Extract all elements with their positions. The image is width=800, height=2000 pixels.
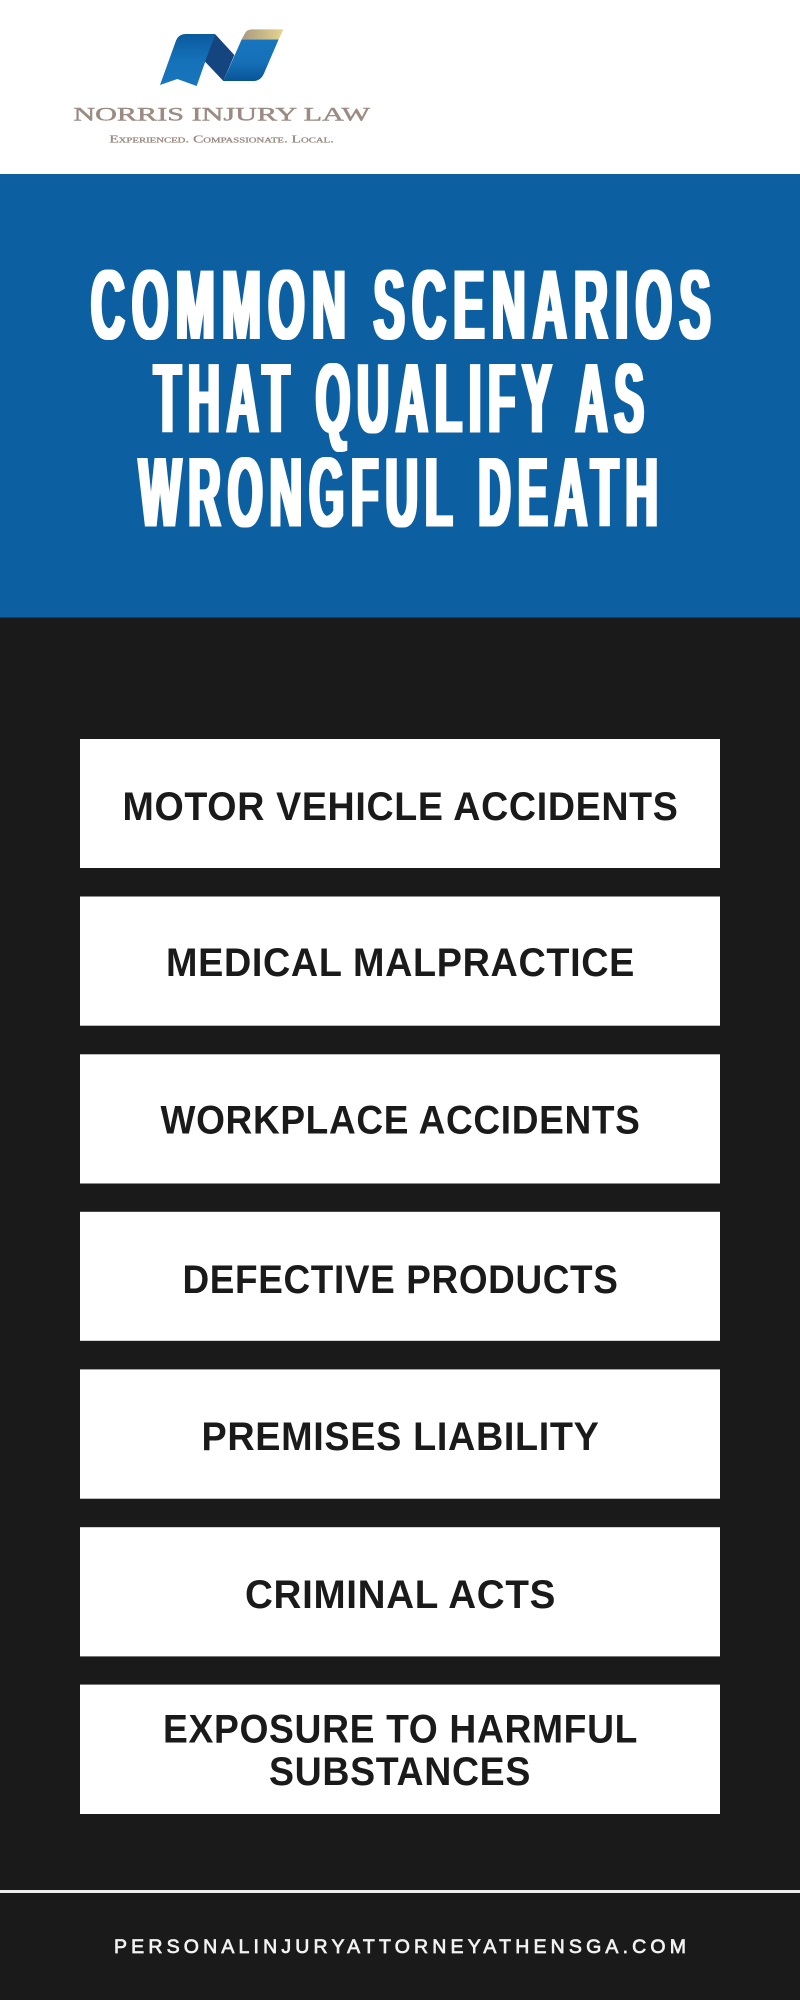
panel: scenario 1: MOTOR VEHICLE ACCIDENTS bbox=[122, 785, 678, 829]
footer url: PERSONALINJURYATTORNEYATHENSGA.COM bbox=[114, 1936, 686, 1958]
panel: scenario 6: CRIMINAL ACTS bbox=[245, 1573, 556, 1617]
panel: blue title band bbox=[0, 174, 800, 618]
panel: scenario 7 bbox=[80, 1685, 720, 1814]
panel: scenario 4 bbox=[80, 1212, 720, 1341]
icon: right ribbon bbox=[223, 39, 279, 81]
panel: scenario 4: DEFECTIVE PRODUCTS bbox=[182, 1258, 618, 1302]
panel: scenario 2: MEDICAL MALPRACTICE bbox=[166, 941, 635, 985]
title bbox=[91, 249, 718, 548]
logo name: NORRIS INJURY LAW bbox=[73, 104, 371, 125]
icon: left ribbon bbox=[160, 34, 215, 86]
panel: scenario 3: WORKPLACE ACCIDENTS bbox=[160, 1098, 640, 1142]
icon: dark fold bbox=[205, 34, 234, 81]
panel: scenario 2 bbox=[80, 896, 720, 1026]
panel: scenario 5 bbox=[80, 1369, 720, 1499]
panel: scenario 6 bbox=[80, 1527, 720, 1656]
panel: scenario 7: SUBSTANCES bbox=[269, 1750, 531, 1794]
panel: scenario 1 bbox=[80, 739, 720, 868]
icon: gold tip bbox=[242, 29, 283, 39]
panel: scenario 7: EXPOSURE TO HARMFUL bbox=[163, 1708, 638, 1752]
white logo band bbox=[0, 0, 800, 174]
panel: scenario 3 bbox=[80, 1054, 720, 1184]
panel: scenario 5: PREMISES LIABILITY bbox=[202, 1415, 600, 1459]
logo tagline: Experienced. Compassionate. Local. bbox=[109, 134, 334, 145]
logo: Norris Injury Law bbox=[73, 29, 371, 145]
